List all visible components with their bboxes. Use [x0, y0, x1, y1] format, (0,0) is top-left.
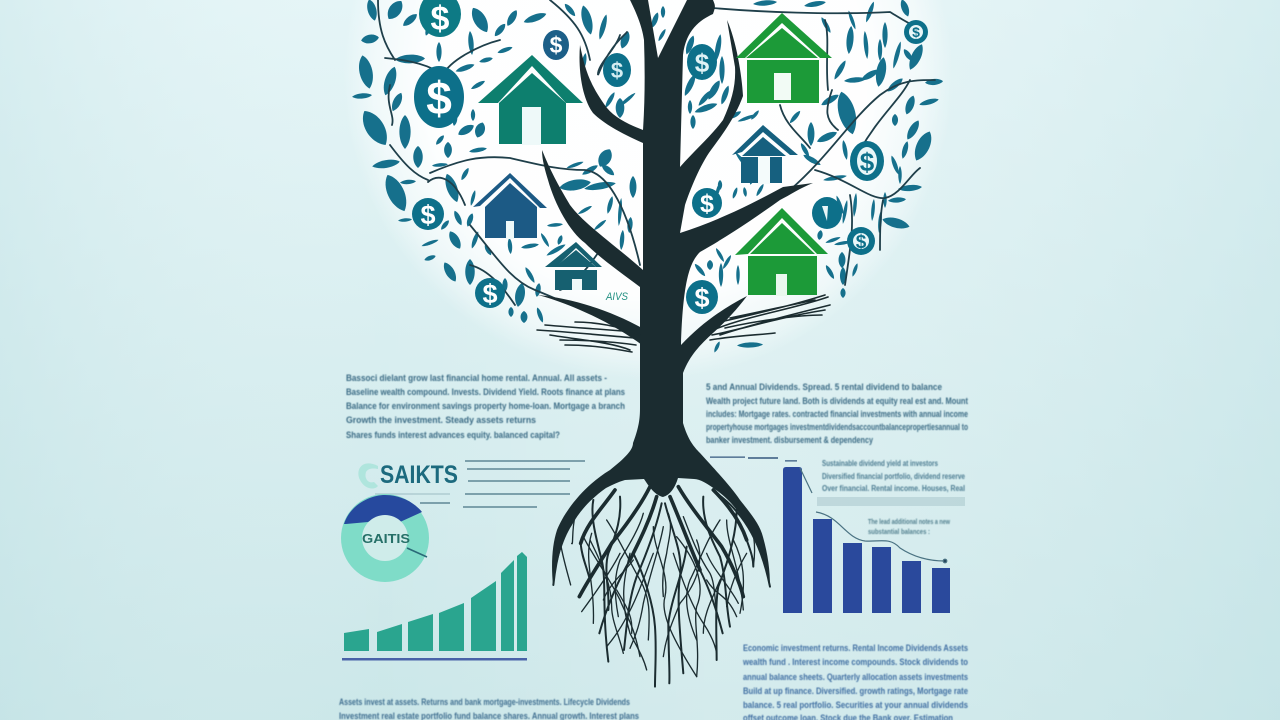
text block: upper left: Baseline wealth compound. Invests. Dividend Yield. Roots finance at plans: [346, 387, 625, 397]
text block: lower right: Economic investment returns. Rental Income Dividends Assets: [743, 643, 968, 653]
money bag: [419, 0, 461, 38]
foliage: leaves: [352, 0, 943, 353]
blue bar chart: [783, 467, 950, 613]
text block: lower right: Build at up finance. Diversified. growth ratings, Mortgage rate: [743, 686, 968, 696]
money bag: [850, 141, 884, 181]
grey band: [817, 497, 965, 506]
money bag: $: [695, 48, 710, 78]
summary lines: [375, 461, 585, 507]
money bag: $: [694, 283, 710, 313]
text block: chart note: [822, 459, 965, 493]
canopy backdrop: [343, 0, 953, 380]
swoosh behind title: [358, 463, 378, 488]
text block: lower right: balance. 5 real portfolio. Securities at your annual dividends: [743, 700, 968, 710]
green growth bar chart: [342, 552, 527, 660]
money bag: [904, 20, 928, 44]
text block: upper right: includes: Mortgage rates. contracted financial investments with annual income: [706, 409, 968, 419]
money bag: [692, 188, 722, 218]
donut chart: GAITIS: [362, 531, 410, 546]
main roots: [579, 487, 747, 597]
money bag: $: [860, 147, 875, 177]
text block: lower left: Assets invest at assets. Returns and bank mortgage-investments. Lifecycle Dividends: [339, 697, 630, 707]
small annotation: substantial balances :: [868, 529, 930, 536]
chart title: SAIKTS: [380, 461, 458, 489]
text block: upper right: propertyhouse mortgages investmentdividendsaccountbalancepropertiesannual to: [706, 422, 968, 432]
money bag: [812, 197, 842, 229]
house: green top: [736, 13, 832, 103]
text block: upper left: Shares funds interest advances equity. balanced capital?: [346, 430, 560, 440]
text block: lower right: wealth fund . Interest income compounds. Stock dividends to: [742, 657, 968, 667]
text block: upper left: Growth the investment. Steady assets returns: [346, 415, 536, 425]
tree roots: [553, 487, 770, 687]
text block: lower left: [339, 697, 639, 720]
text block: chart note: Over financial. Rental income. Houses, Real: [822, 484, 965, 493]
money bag: $: [912, 24, 920, 40]
donut chart: [341, 494, 429, 582]
house: blue right: [732, 125, 798, 184]
money bag: $: [426, 72, 452, 124]
money bag: $: [611, 58, 623, 83]
text block: lower right: [742, 643, 968, 720]
house: blue: [473, 173, 547, 239]
money bag: [603, 53, 631, 87]
small green label in tree: AIVS: [605, 291, 629, 303]
text block: upper left: Bassoci dielant grow last financial home rental. Annual. All assets -: [346, 373, 607, 383]
text block: upper right: Wealth project future land. Both is dividends at equity real est and. Mount: [706, 396, 968, 406]
house: small teal: [545, 242, 602, 290]
house: teal large: [478, 55, 583, 145]
house: green lower: [735, 208, 828, 296]
foliage: twigs: [378, 0, 935, 315]
money bag: $: [482, 279, 498, 309]
text block: upper right: [706, 382, 968, 445]
tree trunk and branches: [537, 0, 830, 587]
money bag: [847, 227, 875, 255]
chart header rule: [710, 457, 797, 461]
foliage: money bags: [412, 0, 928, 314]
houses: [473, 13, 832, 296]
money bag: $: [420, 200, 436, 230]
small annotation: The lead additional notes a new: [868, 519, 950, 526]
money bag: $: [431, 0, 450, 38]
money bag: [414, 66, 464, 128]
money bag: [475, 278, 505, 309]
text block: upper left: Balance for environment savings property home-loan. Mortgage a branch: [346, 401, 625, 411]
text block: upper right: 5 and Annual Dividends. Spread. 5 rental dividend to balance: [706, 382, 942, 392]
trend line: [800, 468, 947, 563]
money bag: $: [550, 32, 563, 58]
money bag: $: [856, 232, 867, 253]
text block: chart note: Sustainable dividend yield at investors: [822, 459, 938, 468]
money bag: [687, 44, 717, 80]
money bag: [543, 30, 569, 60]
money bag: $: [700, 190, 714, 218]
money bag: [686, 280, 718, 314]
small annotation: [868, 519, 950, 536]
money bag: [412, 198, 444, 230]
text block: upper left: [346, 373, 625, 440]
text block: upper right: banker investment. disbursement & dependency: [706, 435, 873, 445]
text block: chart note: Diversified financial portfolio, dividend reserve: [822, 472, 965, 481]
text block: lower right: annual balance sheets. Quarterly allocation assets investments: [743, 672, 968, 682]
